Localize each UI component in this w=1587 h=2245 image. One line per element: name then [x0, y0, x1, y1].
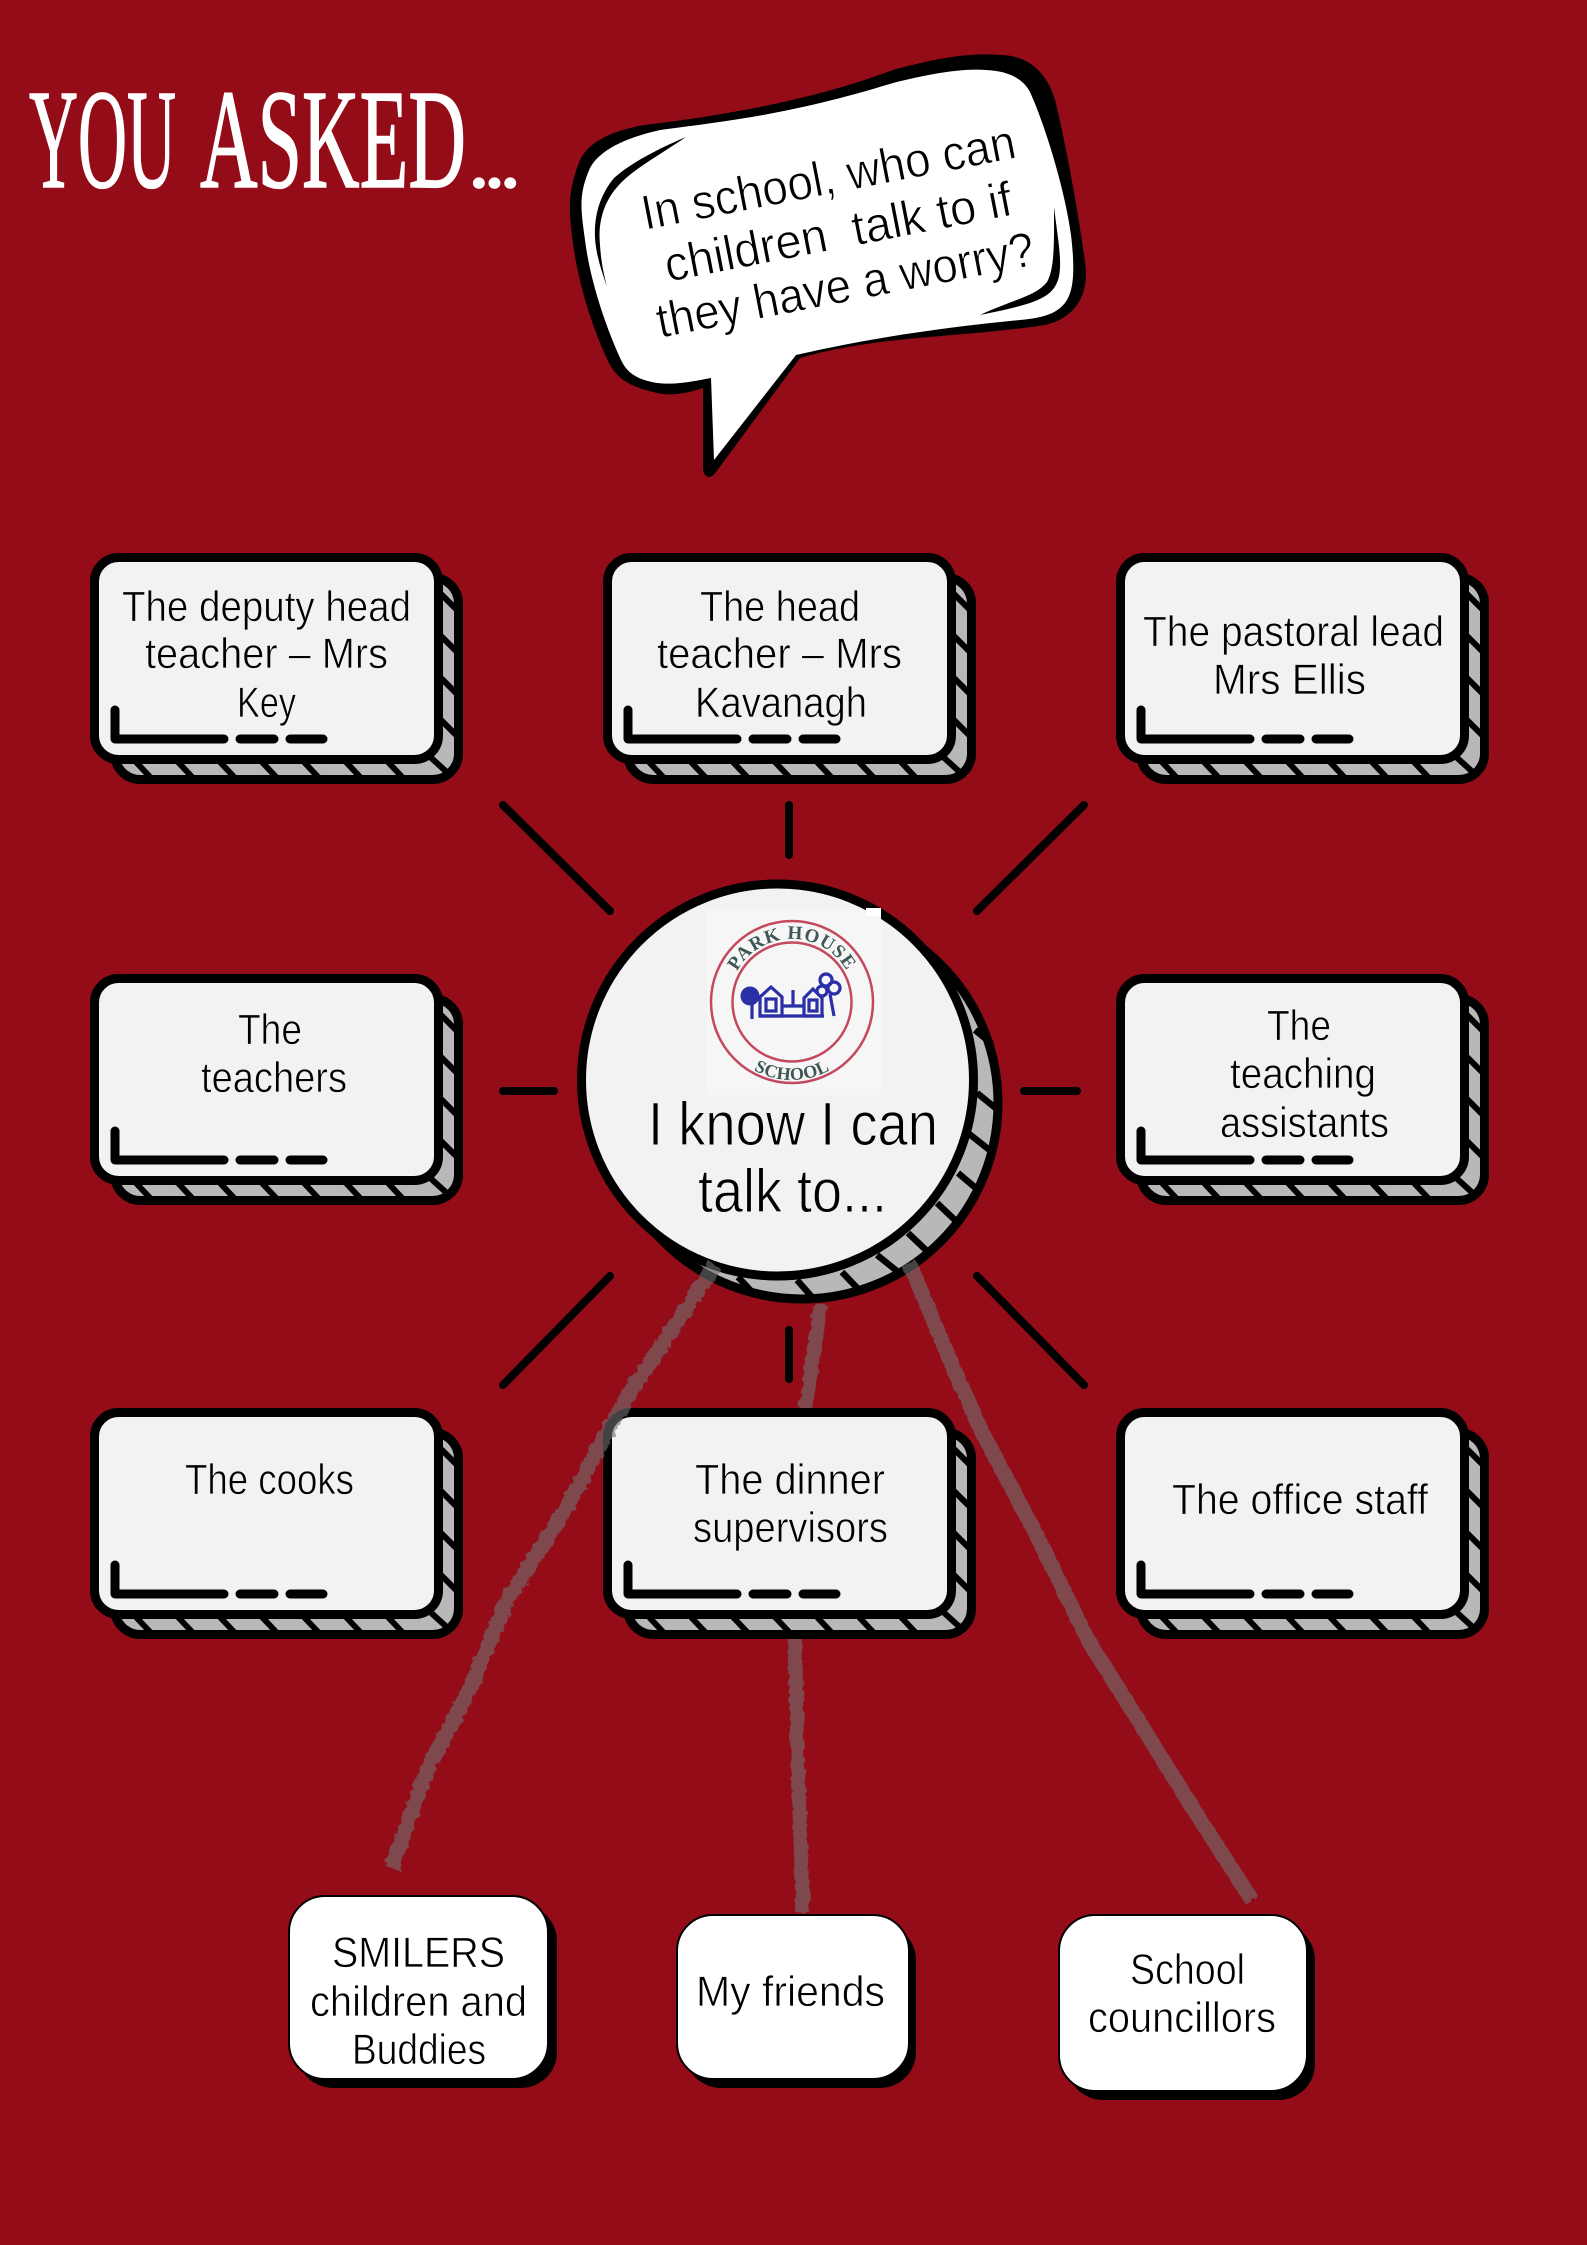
card: head teacher: teacher – Mrs: [657, 630, 902, 678]
card: pastoral lead: [1120, 558, 1484, 780]
bottom card: my friends: [677, 1915, 916, 2088]
card: deputy head: The deputy head: [122, 583, 411, 631]
bottom card: SMILERS: [289, 1896, 557, 2088]
card: deputy head: Key: [237, 679, 296, 727]
logo building: [740, 974, 840, 1019]
card: head teacher: [608, 558, 972, 780]
card: teaching assistants: The: [1267, 1002, 1331, 1050]
chalk line: my friends: [795, 1304, 821, 1913]
title: YOU: [29, 60, 176, 218]
card: teachers: teachers: [201, 1054, 347, 1102]
card: cooks: [94, 1412, 458, 1634]
card: office staff: The office staff: [1172, 1476, 1429, 1524]
rays: [503, 805, 1084, 1385]
card: pastoral lead: The pastoral lead: [1143, 608, 1444, 656]
card: dinner supervisors: [608, 1412, 972, 1634]
card: teaching assistants: teaching: [1230, 1050, 1376, 1098]
circle text: I know I can: [648, 1090, 938, 1158]
school logo: [710, 908, 881, 1084]
school logo: SCHOOL: [754, 1061, 829, 1080]
central circle: [577, 880, 1002, 1304]
speech bubble: [570, 54, 1086, 477]
bottom card: my friends: My friends: [696, 1968, 885, 2016]
bubble text: they have a worry?: [652, 223, 1039, 349]
card: dinner supervisors: The dinner: [695, 1456, 885, 1504]
card: pastoral lead: Mrs Ellis: [1213, 656, 1366, 704]
bubble text: In school, who can: [637, 115, 1020, 241]
card: head teacher: Kavanagh: [695, 679, 867, 727]
card: teachers: [94, 978, 458, 1200]
card: teachers: The: [238, 1006, 302, 1054]
circle text: talk to...: [698, 1157, 887, 1225]
card: head teacher: The head: [700, 583, 860, 631]
card: deputy head: teacher – Mrs: [145, 630, 388, 678]
bottom card: SMILERS: SMILERS: [332, 1929, 505, 1977]
circle text: [648, 1090, 938, 1225]
card: dinner supervisors: supervisors: [693, 1504, 888, 1552]
card: teaching assistants: assistants: [1220, 1099, 1389, 1147]
bubble text: [637, 115, 1039, 349]
card: cooks: The cooks: [185, 1456, 354, 1504]
card: office staff: [1120, 1412, 1484, 1634]
school logo: PARK HOUSE: [726, 926, 856, 971]
bubble inner swooshes: [595, 137, 1060, 315]
bottom card: school councillors: councillors: [1088, 1994, 1276, 2042]
bottom card: school councillors: [1059, 1915, 1315, 2100]
chalk line: SMILERS: [392, 1265, 715, 1868]
title: ASKED: [200, 60, 466, 218]
title: ...: [471, 134, 518, 200]
bubble text: children talk to if: [660, 172, 1017, 293]
bottom card: SMILERS: children and: [310, 1978, 527, 2026]
card: teaching assistants: [1120, 978, 1484, 1200]
bottom card: school councillors: School: [1130, 1946, 1245, 1994]
chalk line: school councillors: [909, 1263, 1252, 1900]
bottom card: SMILERS: Buddies: [352, 2026, 486, 2074]
card: deputy head: [94, 558, 458, 780]
title: [29, 60, 518, 218]
